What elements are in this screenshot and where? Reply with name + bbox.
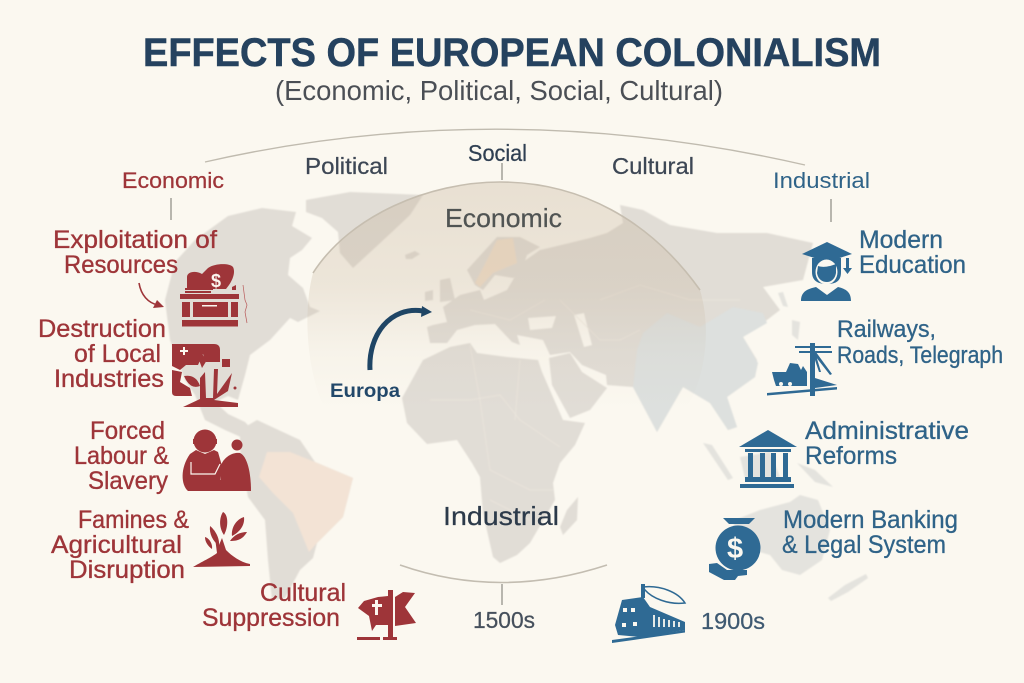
text: Modern Education (859, 226, 966, 279)
text: Railways, Roads, Telegraph: Roads, Telegraph (837, 342, 1003, 369)
text: Modern Education: Education (859, 251, 966, 279)
icon: steam train (612, 584, 685, 643)
title: EFFECTS OF EUROPEAN COLONIALISM (143, 31, 881, 75)
icon: wilting plant (193, 512, 250, 567)
icon: graduate (801, 242, 852, 301)
icon: money chest: $ (211, 271, 221, 291)
arc label: Economic: Economic (122, 168, 224, 193)
arc label: Cultural: Cultural (612, 153, 694, 179)
map: South America (240, 420, 353, 600)
map label: Industrial: Industrial (443, 501, 559, 531)
map: Scandinavia highlight (475, 238, 517, 287)
text: Administrative Reforms: Administrative (805, 417, 969, 445)
map: North America (165, 208, 320, 441)
text: Forced Labour & Slavery: Labour & (74, 442, 169, 470)
timeline: 1500s: 1500s (473, 607, 535, 633)
text: Modern Education: Modern (859, 226, 943, 254)
dome label: Economic: Economic (445, 203, 562, 233)
icon: money bag in hand: $ (727, 533, 743, 565)
map: country borders (430, 285, 740, 520)
text: Destruction of Local Industries: Destruction (38, 315, 166, 343)
map: Brazil highlight (259, 452, 353, 552)
connector ticks (171, 163, 831, 605)
text: Cultural Suppression (202, 579, 346, 632)
text: Modern Banking & Legal System: Modern Banking (783, 506, 958, 534)
map: Eurasia (427, 205, 813, 432)
text: Forced Labour & Slavery: Slavery (88, 467, 168, 495)
text: Famines & Agricultural Disruption (51, 506, 189, 584)
label: Europa: Europa (330, 381, 400, 402)
icon: classical building (739, 430, 797, 488)
map: Madagascar (560, 497, 578, 535)
text: Forced Labour & Slavery: Forced (90, 417, 165, 445)
timeline: 1900s: 1900s (701, 608, 765, 634)
text: Destruction of Local Industries: of Local (74, 340, 161, 368)
text: Exploitation of Resources (53, 226, 217, 279)
text: Forced Labour & Slavery (74, 417, 169, 495)
bottom arc (400, 565, 607, 582)
text: Administrative Reforms (805, 417, 969, 470)
map: Greenland (306, 192, 423, 268)
arc label: Political: Political (305, 153, 388, 179)
dome: globe overlay (307, 182, 706, 410)
text: Exploitation of Resources: Resources (64, 251, 178, 279)
arc label: Industrial: Industrial (773, 168, 870, 193)
text: Modern Banking & Legal System: & Legal System (782, 531, 946, 559)
text: Famines & Agricultural Disruption: Agricultural (51, 531, 182, 559)
arrow: resources (139, 283, 164, 308)
text: Destruction of Local Industries: Industries (54, 365, 164, 393)
icon: money bag in hand (709, 518, 760, 580)
map: New Zealand (828, 574, 868, 601)
icon: forced labourers (183, 430, 251, 491)
map: Southeast Asia islands (703, 292, 833, 487)
arc label: Social: Social (468, 140, 527, 166)
arrow: to Europe (370, 306, 432, 370)
dome outline (313, 182, 700, 290)
text: Railways, Roads, Telegraph (837, 316, 1003, 369)
map: Iceland (405, 251, 420, 259)
text: Famines & Agricultural Disruption: Famines & (78, 506, 189, 534)
text: Cultural Suppression: Suppression (202, 604, 340, 632)
text: Administrative Reforms: Reforms (805, 442, 897, 470)
icon: train and telegraph (767, 343, 837, 396)
map: China and India region (633, 307, 767, 432)
text: Modern Banking & Legal System (782, 506, 958, 559)
map: Scandinavia (467, 237, 540, 290)
icon: flag with cross (357, 590, 416, 640)
text: Famines & Agricultural Disruption: Disruption (69, 556, 185, 584)
icon: broken industry plant (172, 344, 238, 407)
text: Exploitation of Resources: Exploitation of (53, 226, 217, 254)
map: United Kingdom (425, 278, 455, 302)
text: Railways, Roads, Telegraph: Railways, (837, 316, 936, 343)
text: Destruction of Local Industries (38, 315, 166, 393)
map: Australia (730, 495, 830, 575)
world map (165, 192, 868, 601)
top arc (205, 129, 805, 165)
text: Cultural Suppression: Cultural (260, 579, 346, 607)
map: Africa (402, 343, 585, 563)
icon: money chest (180, 264, 247, 326)
map: Arabian Peninsula (549, 353, 607, 418)
subtitle: (Economic, Political, Social, Cultural) (275, 75, 723, 106)
